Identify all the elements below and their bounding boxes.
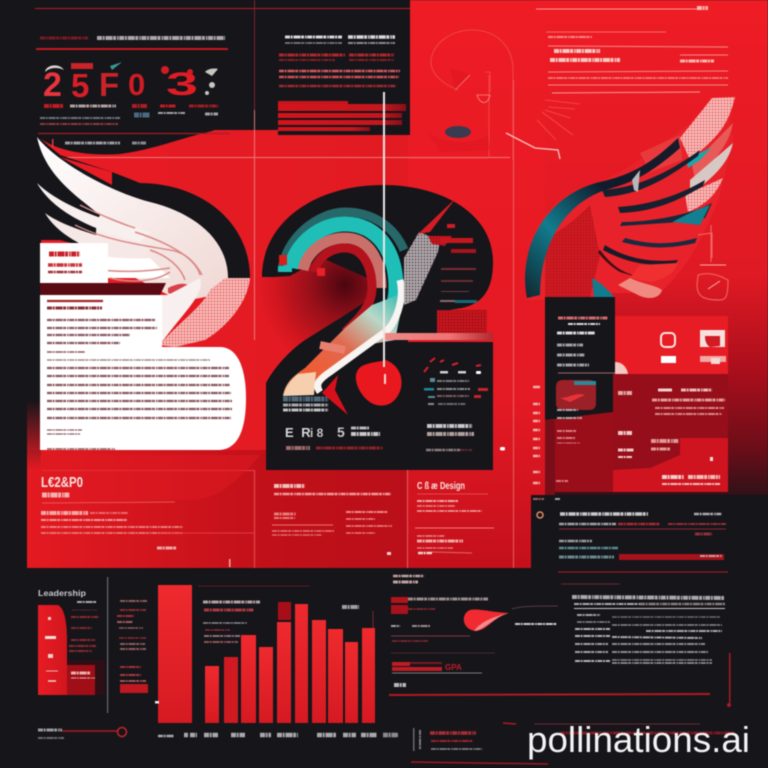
right-top faint line art and text bbox=[410, 8, 728, 160]
panel: top-left dark header bbox=[35, 0, 410, 154]
panel: lower-centre red text bbox=[272, 481, 494, 555]
mini data rows bbox=[424, 358, 488, 404]
black panel text bbox=[283, 399, 474, 450]
bar chart bbox=[155, 585, 397, 736]
panel: bottom-middle callout with teardrop bbox=[389, 576, 710, 695]
halftone tail bbox=[160, 278, 250, 347]
timeline slider bbox=[38, 728, 126, 738]
red card bbox=[38, 605, 95, 695]
icon: image tile bbox=[700, 330, 725, 347]
red ball bbox=[356, 360, 402, 406]
heading numerals: 2 bbox=[43, 66, 62, 104]
vertical marker bbox=[729, 653, 730, 703]
right wing illustration bbox=[525, 97, 736, 300]
heading numerals: F bbox=[99, 66, 119, 103]
black numeral shape bbox=[262, 185, 493, 470]
header stat labels bbox=[40, 106, 218, 124]
watermark: pollinations.ai bbox=[527, 719, 750, 760]
dark card text bbox=[556, 318, 620, 481]
teal ring bbox=[282, 212, 404, 332]
wing label bbox=[48, 254, 82, 272]
panel: right column dashboard bbox=[500, 297, 728, 495]
heading numerals bbox=[43, 62, 218, 104]
red chart ticks bbox=[440, 224, 477, 303]
vertical white line bbox=[383, 92, 385, 367]
panel: lower-centre red text: C ß æ Design bbox=[417, 481, 465, 492]
big number 2 illustration bbox=[256, 92, 493, 470]
side labels bbox=[533, 387, 540, 483]
panel: bottom-right text table bbox=[558, 572, 731, 707]
panel: bottom-left sidebar: Leadership bbox=[38, 588, 86, 598]
heading numerals: 5 bbox=[71, 67, 89, 104]
vertical rule bbox=[107, 577, 108, 713]
feathers bbox=[37, 137, 228, 300]
thin grid lines bbox=[42, 0, 514, 568]
body text bbox=[47, 301, 232, 449]
teardrop icon bbox=[464, 606, 558, 631]
arrow bbox=[322, 375, 348, 415]
panel: bottom-left sidebar bbox=[38, 577, 148, 738]
heading numerals: 0 bbox=[128, 67, 145, 102]
panel: lower-left red text bbox=[40, 455, 260, 567]
panel: right lower dark strip bbox=[531, 495, 768, 572]
colourful diagonal band bbox=[283, 292, 405, 396]
panel: bottom footer text bbox=[383, 723, 735, 764]
icon: monitor bbox=[661, 333, 675, 347]
icon: white badge bbox=[500, 447, 505, 450]
left white wing illustration bbox=[36, 135, 250, 347]
panel: bottom-middle callout with teardrop: GPA bbox=[445, 663, 462, 672]
panel: lower-left red text: L€2&P0 bbox=[41, 474, 83, 491]
panel: top-centre text with red stripes bbox=[278, 37, 406, 131]
feathers bbox=[526, 97, 736, 300]
small gauge icon bbox=[697, 225, 728, 300]
white stripe bbox=[318, 280, 401, 392]
dotted wing fragment bbox=[404, 232, 440, 305]
counter of numeral bbox=[256, 258, 372, 383]
panel: white text block bbox=[40, 243, 246, 450]
black panel text: E R bbox=[285, 425, 313, 440]
black panel text: i 8 bbox=[310, 426, 324, 440]
chart text bbox=[203, 602, 359, 642]
heading numerals: 3 bbox=[166, 66, 198, 102]
chart axis labels bbox=[158, 735, 397, 736]
icon: dark ellipse bbox=[445, 126, 471, 138]
black panel text: 5 bbox=[337, 424, 345, 440]
panel text bbox=[618, 390, 725, 484]
